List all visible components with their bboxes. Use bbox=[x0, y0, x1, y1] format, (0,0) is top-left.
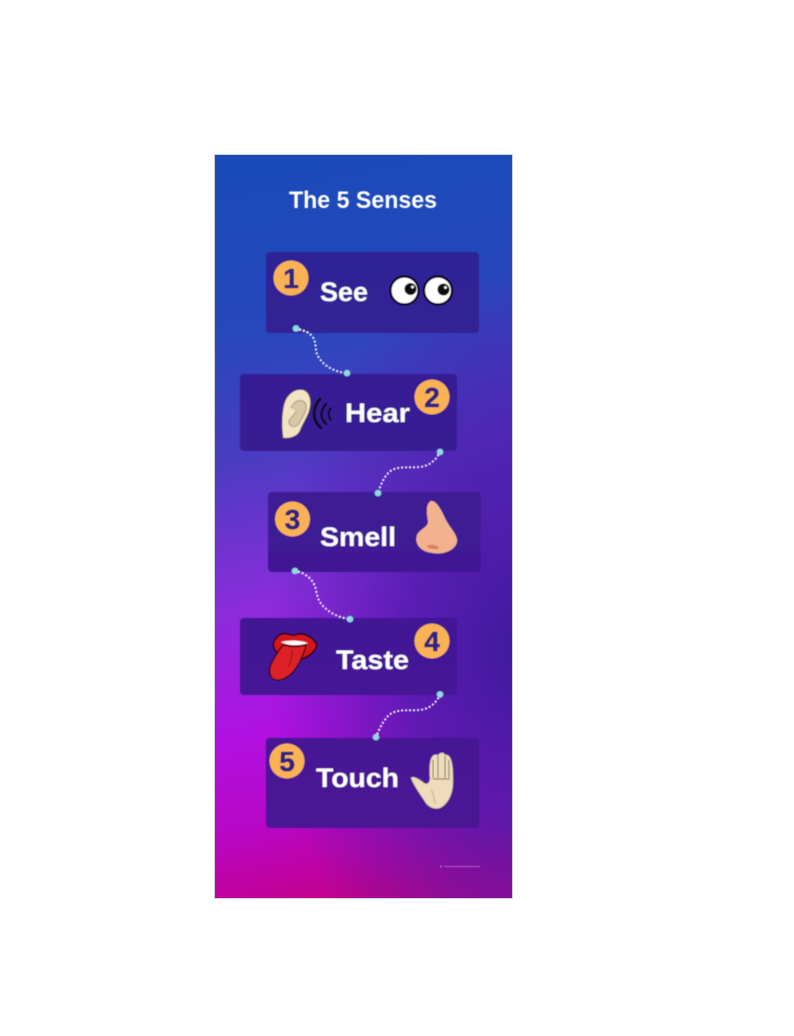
icon: nose bbox=[416, 501, 457, 553]
number badge 3: 3 bbox=[285, 504, 300, 535]
icon: mouth with tongue bbox=[270, 633, 317, 680]
number badge 1: 1 bbox=[283, 263, 299, 294]
number badge 4: 4 bbox=[424, 626, 440, 657]
number badge 2: 2 bbox=[424, 382, 440, 413]
label: taste: Taste bbox=[336, 645, 409, 675]
panel: touch bbox=[266, 738, 479, 828]
icon: hand bbox=[411, 753, 453, 809]
connector 4 to 5 bbox=[373, 691, 443, 740]
number badge 5: 5 bbox=[279, 746, 295, 777]
number badge 3 bbox=[275, 502, 310, 536]
connector 2 to 3 bbox=[375, 449, 443, 496]
label: hear: Hear bbox=[345, 398, 411, 428]
panel: hear bbox=[240, 374, 457, 451]
icon: eyes bbox=[390, 276, 452, 304]
number badge 5 bbox=[270, 744, 304, 778]
number badge 4 bbox=[414, 624, 450, 658]
poster background bbox=[214, 154, 512, 898]
label: touch: Touch bbox=[316, 763, 399, 793]
connector 1 to 2 bbox=[293, 325, 350, 376]
title: The 5 Senses bbox=[289, 187, 437, 214]
number badge 2 bbox=[414, 380, 450, 414]
number badge 1 bbox=[274, 260, 308, 296]
icon: ear with sound waves bbox=[282, 390, 331, 438]
footer credit mark bbox=[440, 866, 480, 867]
connector 3 to 4 bbox=[292, 568, 353, 622]
panel: taste bbox=[240, 618, 457, 695]
panel: see bbox=[266, 252, 479, 333]
panel: smell bbox=[268, 492, 481, 572]
label: see: See bbox=[320, 277, 368, 307]
label: smell: Smell bbox=[320, 522, 396, 552]
